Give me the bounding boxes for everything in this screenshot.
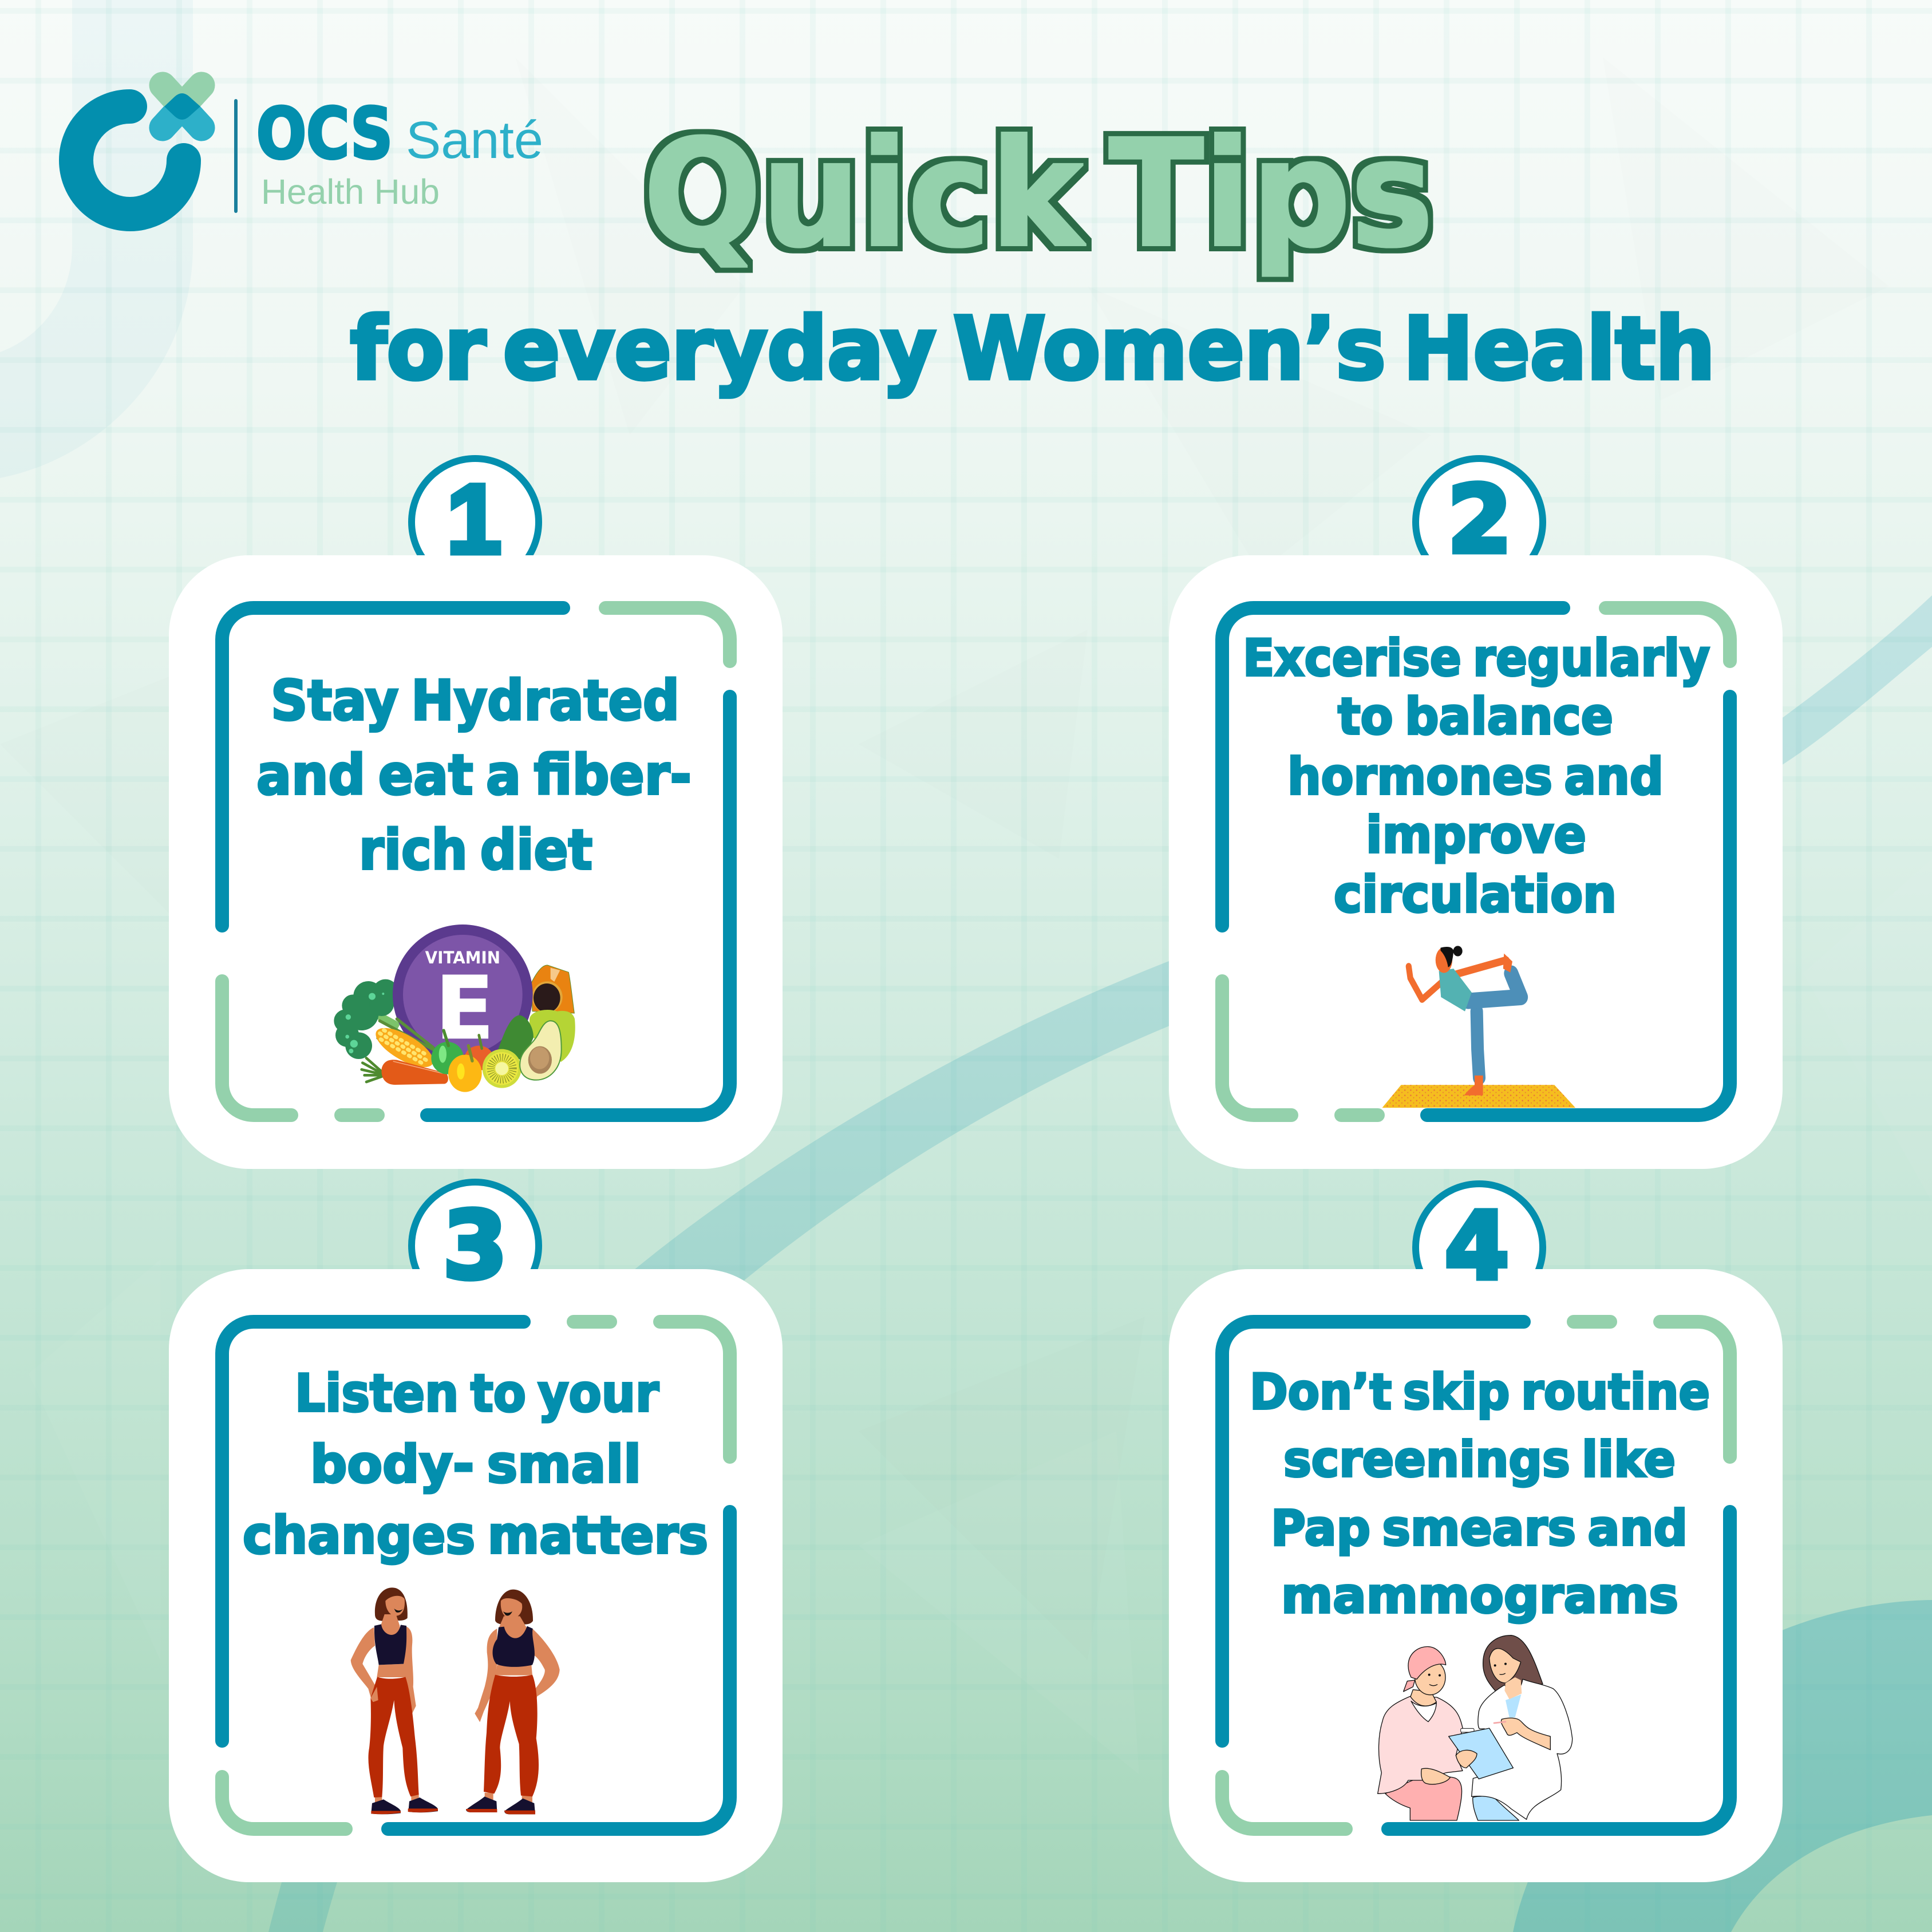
tip text: and eat a fiber- — [256, 743, 692, 807]
patient — [1378, 1647, 1463, 1820]
icon: yoga pose on mat — [1382, 946, 1575, 1108]
logo icon — [76, 85, 202, 214]
icon: vitamin E with vegetables: VITAMIN — [425, 948, 500, 967]
subtitle: for everyday Women’s Health — [350, 299, 1715, 399]
tip text: to balance — [1338, 687, 1613, 746]
tip text: Don’t skip routine — [1250, 1364, 1710, 1421]
panel: tip 1 — [169, 459, 783, 1169]
logo — [76, 85, 543, 214]
number 4: 4 — [1445, 1193, 1509, 1301]
frame — [222, 1322, 730, 1829]
tip text — [243, 1364, 708, 1566]
woman left — [351, 1587, 438, 1814]
icon: vitamin E with vegetables — [334, 924, 575, 1092]
tip text: Excerise regularly — [1243, 629, 1710, 688]
panel: tip 2 — [1169, 459, 1783, 1169]
tip text: screenings like — [1283, 1431, 1676, 1488]
tip text: changes matters — [243, 1506, 708, 1566]
number 2: 2 — [1448, 467, 1512, 574]
doctor — [1449, 1635, 1573, 1820]
icon: vitamin E with vegetables: E — [435, 958, 494, 1058]
tip text: Listen to your — [295, 1364, 659, 1424]
tip text: improve — [1366, 805, 1586, 864]
tip text: Pap smears and — [1271, 1500, 1688, 1557]
tip text: circulation — [1334, 865, 1617, 924]
logo wordmark OCS: OCS — [256, 93, 393, 175]
tip text — [1250, 1364, 1710, 1625]
title: Quick Tips — [643, 108, 1433, 280]
frame — [222, 608, 730, 1115]
tip text: mammograms — [1281, 1567, 1678, 1625]
icon: patient and doctor with clipboard — [1378, 1635, 1573, 1820]
panel: tip 3 — [169, 1182, 783, 1882]
woman right — [466, 1590, 560, 1814]
tip text — [1243, 629, 1710, 924]
tip text: body- small — [310, 1435, 641, 1495]
frame — [1222, 1322, 1730, 1829]
number 1: 1 — [447, 464, 501, 574]
panel: tip 4 — [1169, 1184, 1783, 1882]
tip text: rich diet — [359, 818, 592, 882]
icon: two women body shapes — [351, 1587, 560, 1814]
tip text: hormones and — [1287, 747, 1664, 806]
logo tagline: Health Hub — [261, 172, 440, 211]
logo wordmark Santé: Santé — [406, 111, 543, 169]
number 3: 3 — [443, 1192, 507, 1300]
tip text: Stay Hydrated — [271, 669, 679, 733]
tip text — [256, 669, 692, 882]
frame — [1222, 608, 1730, 1115]
